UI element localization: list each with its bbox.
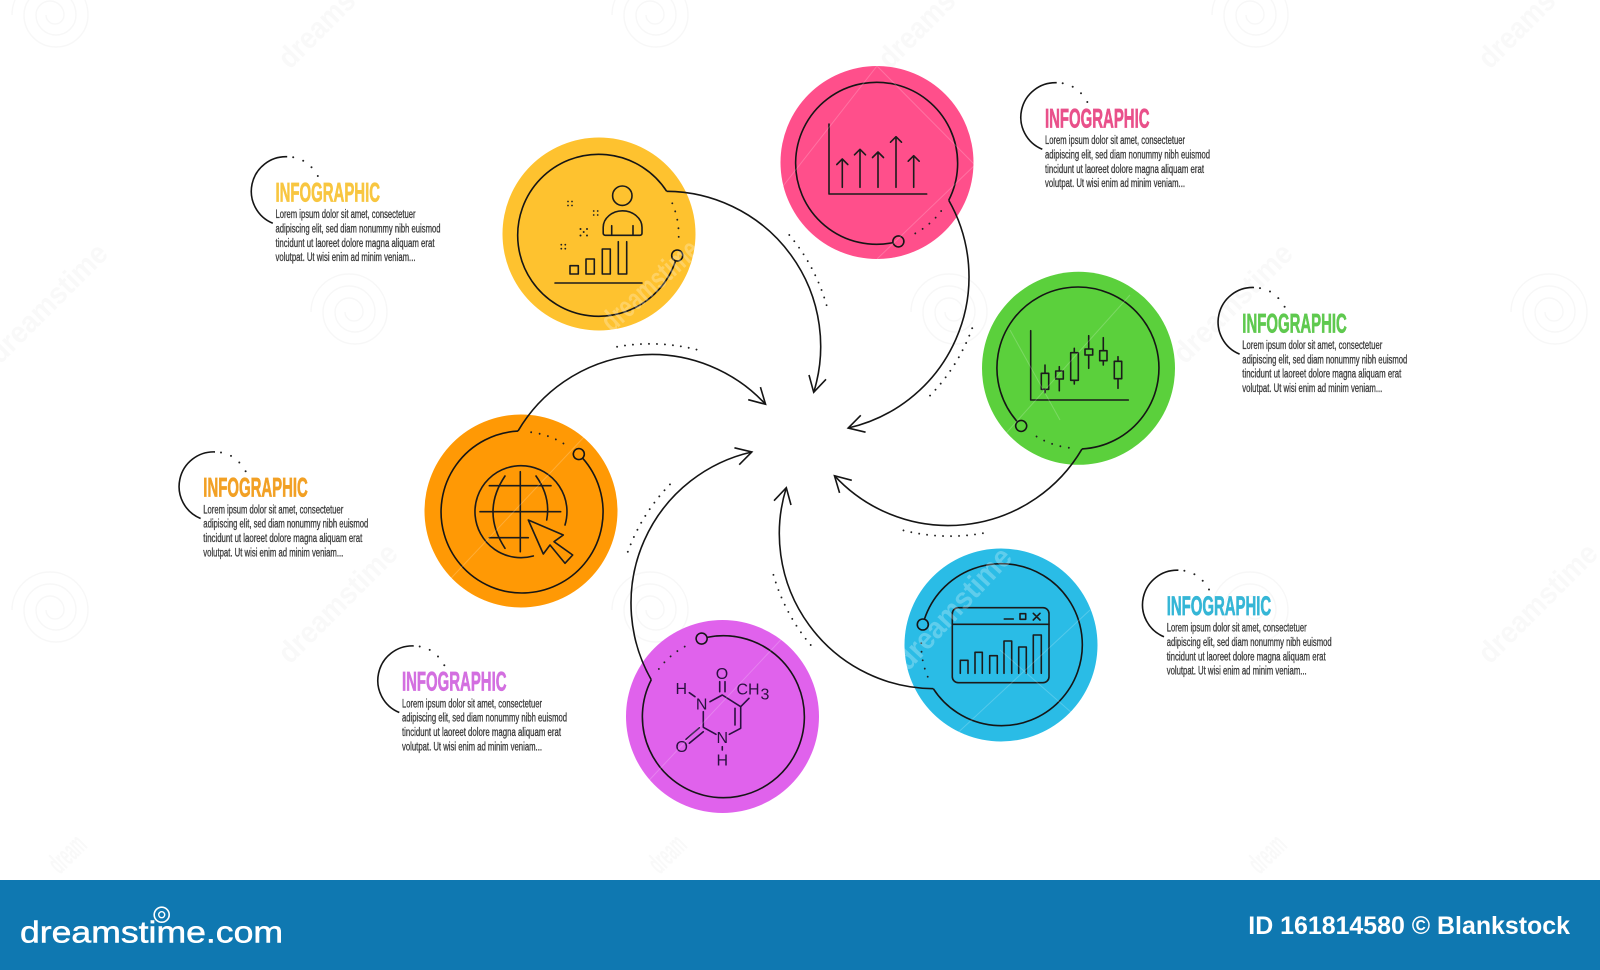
text block: blue: tincidunt ut laoreet dolore magna aliquam erat xyxy=(1167,651,1326,663)
text block: purple: INFOGRAPHIC xyxy=(402,667,506,697)
text block: yellow: volutpat. Ut wisi enim ad minim veniam... xyxy=(276,252,416,264)
text block: yellow: INFOGRAPHIC xyxy=(276,178,380,208)
watermark background: dreamstime xyxy=(272,537,405,670)
icon: thymine molecule xyxy=(675,666,770,770)
watermark over circles: dreamstime xyxy=(889,541,1019,677)
icon: candlestick chart xyxy=(1031,331,1128,400)
orange circle xyxy=(424,414,618,608)
icon: thymine molecule: H xyxy=(676,681,687,698)
text block: yellow: tincidunt ut laoreet dolore magna aliquam erat xyxy=(276,238,435,250)
text block: yellow: Lorem ipsum dolor sit amet, consectetuer xyxy=(276,209,416,221)
text block: blue: adipiscing elit, sed diam nonummy nibh euismod xyxy=(1167,637,1332,649)
text block: purple: adipiscing elit, sed diam nonummy nibh euismod xyxy=(402,713,567,725)
icon: thymine molecule: N xyxy=(696,696,707,714)
text block: green: adipiscing elit, sed diam nonummy nibh euismod xyxy=(1242,354,1407,366)
text block: purple: volutpat. Ut wisi enim ad minim veniam... xyxy=(402,741,542,753)
watermark background: dream xyxy=(42,828,93,880)
panel: blue step xyxy=(772,488,1098,742)
text block: pink: volutpat. Ut wisi enim ad minim veniam... xyxy=(1045,178,1185,190)
text block: orange: Lorem ipsum dolor sit amet, consectetuer xyxy=(203,504,343,516)
watermark over circles xyxy=(440,66,1130,790)
panel: pink step xyxy=(700,53,1062,441)
panel: green step xyxy=(827,219,1189,607)
text block: blue: Lorem ipsum dolor sit amet, consectetuer xyxy=(1167,623,1307,635)
icon: person with growth bars xyxy=(555,186,642,283)
purple circle xyxy=(626,620,819,813)
icon: thymine molecule: O xyxy=(716,666,728,683)
text block: orange: INFOGRAPHIC xyxy=(203,473,308,503)
text block: orange: volutpat. Ut wisi enim ad minim veniam... xyxy=(203,547,343,559)
text block: pink: Lorem ipsum dolor sit amet, consectetuer xyxy=(1045,135,1185,147)
icon: thymine molecule: CH xyxy=(736,682,760,698)
text block: green xyxy=(1218,287,1407,395)
text block: green: volutpat. Ut wisi enim ad minim veniam... xyxy=(1242,383,1382,395)
text block: yellow xyxy=(251,156,440,264)
text block: pink: tincidunt ut laoreet dolore magna aliquam erat xyxy=(1045,164,1205,176)
text block: green: INFOGRAPHIC xyxy=(1242,308,1347,338)
panel: purple step xyxy=(538,439,900,827)
text block: blue xyxy=(1142,570,1332,678)
text block: pink: adipiscing elit, sed diam nonummy nibh euismod xyxy=(1045,150,1210,162)
purple ring and arrow xyxy=(538,439,900,827)
green ring and arrow xyxy=(827,219,1189,607)
text block: green: Lorem ipsum dolor sit amet, consectetuer xyxy=(1242,340,1382,352)
icon: globe with cursor xyxy=(475,466,573,563)
text block: pink xyxy=(1021,82,1210,190)
text block: pink: INFOGRAPHIC xyxy=(1045,104,1150,134)
blue ring and arrow xyxy=(772,488,1082,726)
text block: yellow: adipiscing elit, sed diam nonummy nibh euismod xyxy=(276,224,440,236)
icon: browser window with bar chart xyxy=(952,608,1049,683)
text block: orange: tincidunt ut laoreet dolore magna aliquam erat xyxy=(203,533,363,545)
pink circle xyxy=(780,66,974,259)
text block: purple xyxy=(378,646,567,753)
text block: orange xyxy=(179,452,368,559)
text block: purple: Lorem ipsum dolor sit amet, consectetuer xyxy=(402,698,542,710)
text block: green: tincidunt ut laoreet dolore magna aliquam erat xyxy=(1242,369,1402,381)
yellow ring and arrow xyxy=(518,154,828,392)
panel: orange step xyxy=(411,273,773,661)
text block: blue: INFOGRAPHIC xyxy=(1167,591,1271,621)
icon: thymine molecule: 3 xyxy=(761,686,770,704)
text block: blue: volutpat. Ut wisi enim ad minim veniam... xyxy=(1167,666,1307,678)
footer bar xyxy=(0,880,1600,970)
footer logo: dreamstime.com xyxy=(20,915,283,950)
panel: yellow step xyxy=(502,138,828,392)
watermark over circles: dreamstime xyxy=(595,233,706,338)
text block: orange: adipiscing elit, sed diam nonummy nibh euismod xyxy=(203,519,368,531)
pink ring and arrow xyxy=(700,53,1062,441)
image id credit: ID 161814580 © Blankstock xyxy=(1248,912,1570,940)
watermark background: dream xyxy=(642,828,693,880)
watermark background: dream xyxy=(1242,828,1293,880)
icon: thymine molecule: O xyxy=(675,739,688,756)
yellow circle xyxy=(502,138,696,330)
icon: thymine molecule: H xyxy=(717,753,728,770)
icon: upward arrows chart xyxy=(829,124,927,194)
watermark background: dreamstime xyxy=(1167,237,1300,370)
orange ring and arrow xyxy=(411,273,773,661)
blue circle xyxy=(904,548,1098,742)
text block: purple: tincidunt ut laoreet dolore magna aliquam erat xyxy=(402,727,562,739)
green circle xyxy=(982,272,1175,465)
icon: thymine molecule: N xyxy=(717,730,728,747)
